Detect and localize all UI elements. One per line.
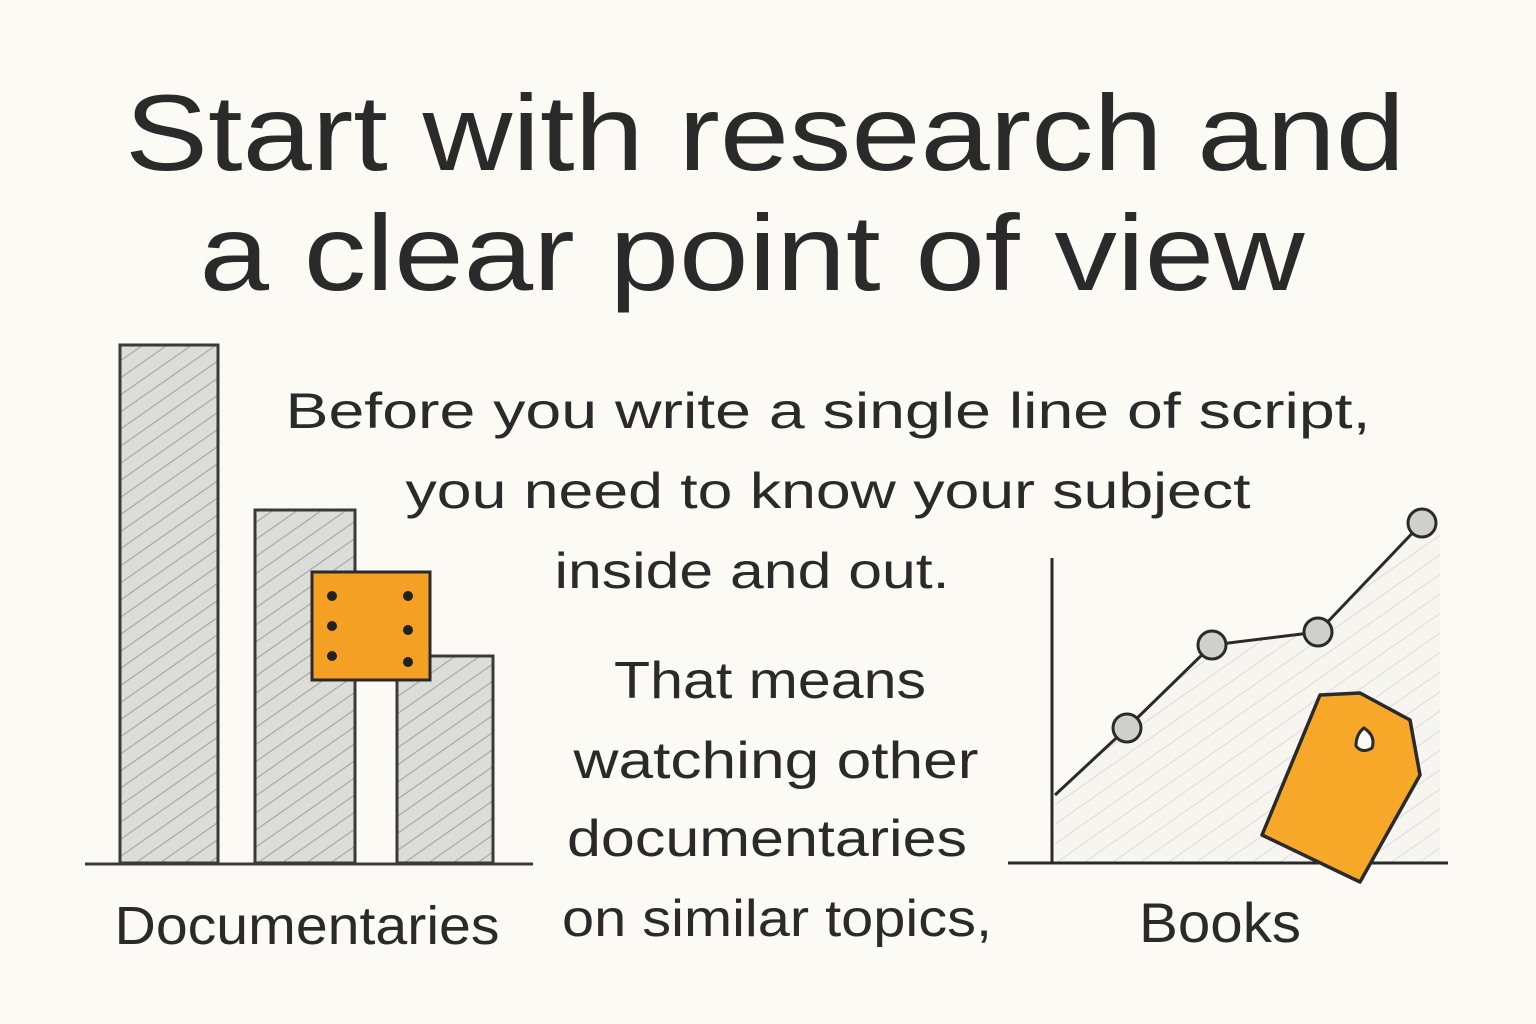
label: books: Books: [1139, 891, 1301, 954]
body text: intro: [286, 383, 1370, 599]
body text: intro: inside and out.: [554, 543, 950, 599]
body text: that means: [562, 652, 992, 948]
body text: that means: documentaries: [567, 810, 967, 868]
line chart: books: [1008, 509, 1448, 882]
label: documentaries: Documentaries: [114, 896, 499, 956]
title: [125, 72, 1405, 313]
bar chart: documentaries: [85, 345, 533, 864]
body text: intro: you need to know your subject: [406, 463, 1251, 519]
body text: that means: That means: [614, 652, 926, 710]
title: Start with research and: [125, 72, 1405, 193]
body text: that means: watching other: [572, 732, 978, 790]
icon: orange film square: [312, 572, 430, 680]
icon: orange tag: [1262, 693, 1420, 882]
body text: intro: Before you write a single line of script,: [286, 383, 1370, 439]
title: a clear point of view: [200, 192, 1306, 313]
body text: that means: on similar topics,: [562, 890, 992, 948]
